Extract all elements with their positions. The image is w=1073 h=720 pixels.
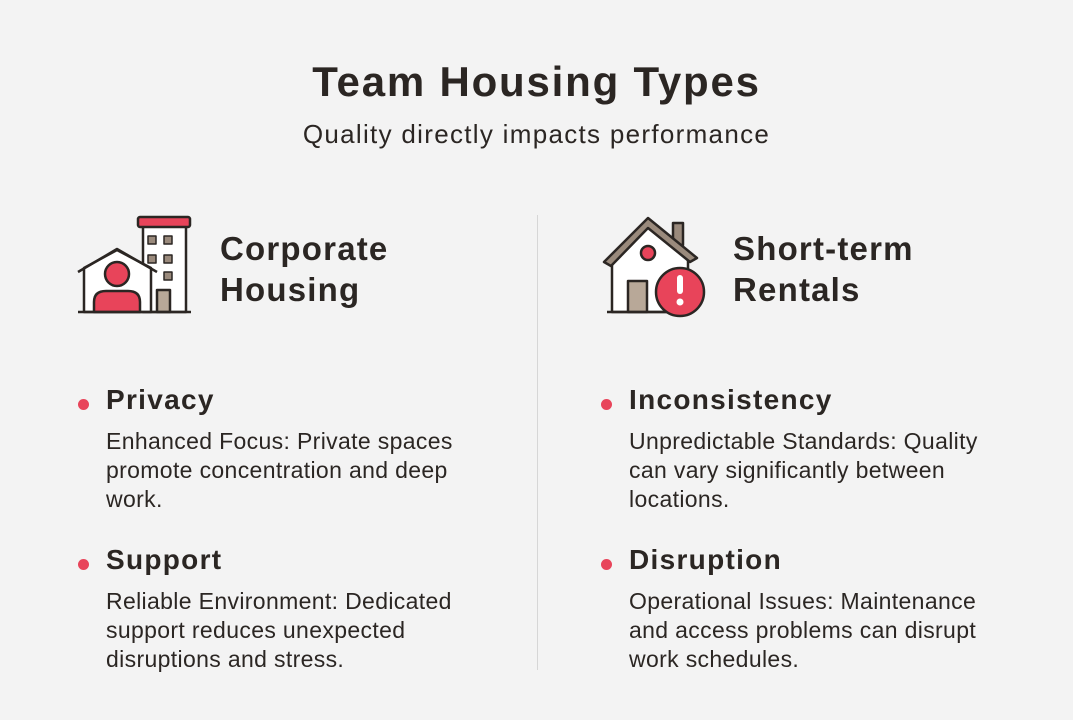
bullet: privacy <box>78 384 453 512</box>
divider <box>537 215 538 670</box>
heading: Short-term <box>733 230 914 267</box>
bullet: disruption <box>601 544 976 672</box>
icon: short-term rental <box>602 216 706 318</box>
bullet: inconsistency: Inconsistency <box>629 384 833 415</box>
bullet: support <box>78 544 452 672</box>
bullet: inconsistency <box>601 384 978 512</box>
bullet: disruption: Disruption <box>629 544 782 575</box>
heading <box>733 230 914 308</box>
bullet: privacy: Enhanced Focus: Private spaces promote concentration and deep work. <box>106 428 453 512</box>
heading: Housing <box>220 271 360 308</box>
heading <box>220 230 388 308</box>
bullet: support: Support <box>106 544 222 575</box>
bullet: support: Reliable Environment: Dedicated support reduces unexpected disruptions and stress. <box>106 588 452 672</box>
panel: corporate housing <box>77 216 453 672</box>
icon: corporate housing <box>77 216 192 314</box>
bullet: privacy: Privacy <box>106 384 215 415</box>
subtitle: Quality directly impacts performance <box>303 119 770 149</box>
heading: Corporate <box>220 230 388 267</box>
title: Team Housing Types <box>312 58 761 105</box>
bullet: disruption: Operational Issues: Maintenance and access problems can disrupt work schedules. <box>629 588 976 672</box>
bullet: inconsistency: Unpredictable Standards: Quality can vary significantly between locations. <box>629 428 978 512</box>
panel: short-term rentals <box>601 216 978 672</box>
heading: Rentals <box>733 271 861 308</box>
